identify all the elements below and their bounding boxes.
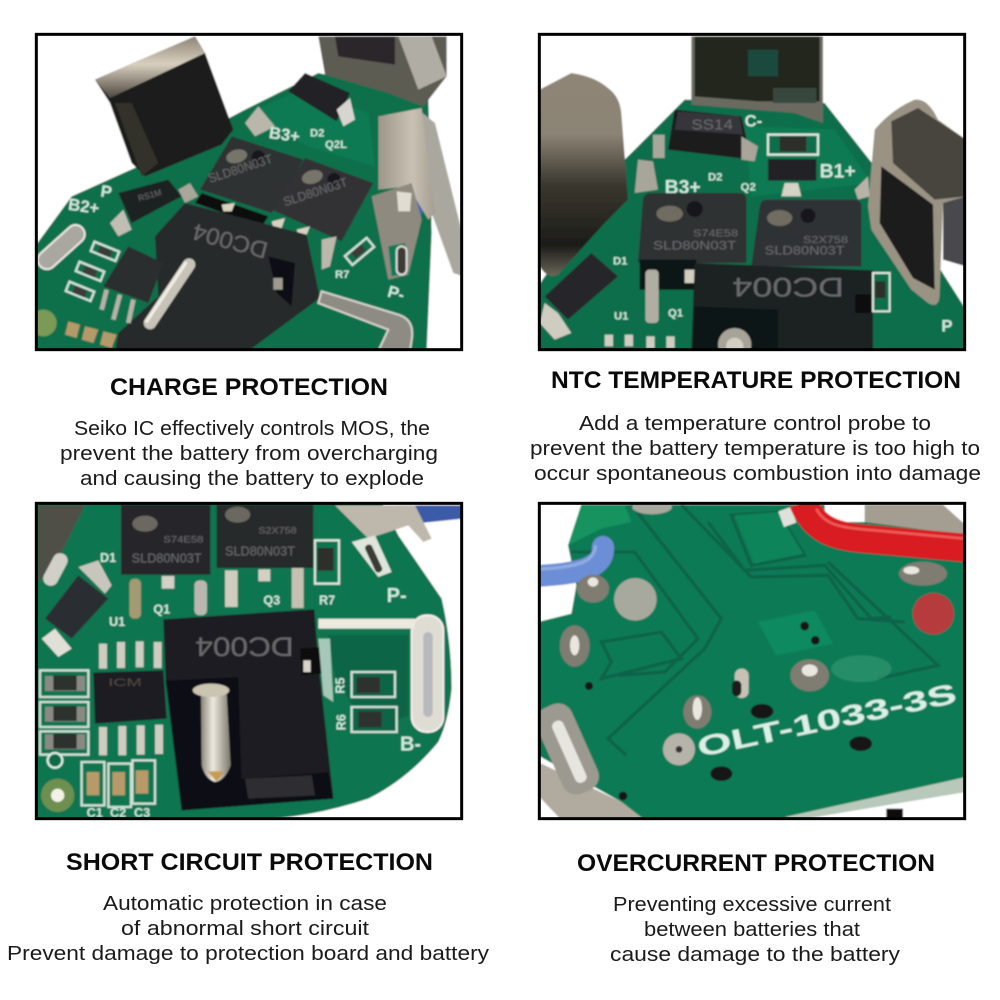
metal clip left (95, 36, 233, 176)
text: ntc temperature description (530, 413, 981, 485)
black connector (163, 609, 333, 810)
component markings: SLD80N03T (132, 552, 202, 566)
component markings: DC004 (732, 272, 844, 302)
component markings: S2X758 (803, 235, 849, 246)
text: overcurrent description (610, 894, 900, 966)
silkscreen labels: B1+ (820, 161, 856, 182)
control ic (103, 246, 163, 303)
solder pads (41, 779, 74, 812)
logo marks (656, 206, 792, 226)
component markings: DC004 (190, 219, 270, 263)
silkscreen labels: R6 (335, 714, 349, 730)
panel: charge protection photo: D2 (310, 127, 324, 139)
text: overcurrent description: Preventing excessive current (613, 894, 891, 916)
text: charge protection description: prevent the battery from overcharging (60, 443, 438, 465)
component markings (108, 526, 297, 689)
circuit board (35, 73, 432, 351)
silkscreen labels: C3 (134, 806, 150, 820)
mosfets (638, 193, 746, 263)
photo frame (539, 34, 965, 350)
component markings: SLD80N03T (207, 152, 275, 186)
text: short circuit description: Prevent damage to protection board and battery (7, 943, 489, 965)
silkscreen labels: B- (400, 733, 421, 755)
diode rs1m (118, 180, 182, 223)
circuit board (35, 502, 452, 820)
component markings: SS14 (691, 118, 733, 134)
diode d2 (288, 73, 350, 121)
left resistors (40, 670, 88, 755)
right metal clip (868, 100, 966, 305)
component markings: SLD80N03T (765, 244, 845, 258)
solder pad and capacitors (38, 308, 58, 338)
silkscreen labels: P- (386, 282, 407, 305)
text: charge protection description (60, 418, 438, 490)
metal clip top (318, 36, 447, 106)
left clip (38, 505, 85, 582)
silkscreen labels: Q3 (263, 594, 280, 608)
board marking: OLT-1033-3S (694, 678, 959, 763)
component markings: SLD80N03T (225, 544, 295, 558)
text: short circuit description: Automatic protection in case (103, 893, 387, 915)
board bottom edge (785, 777, 966, 820)
metal pin (150, 265, 189, 323)
silkscreen labels: C2 (110, 806, 126, 820)
capacitors (82, 760, 155, 807)
circuit board (538, 505, 966, 820)
red wire (778, 507, 796, 527)
silkscreen labels: B2+ (67, 195, 101, 218)
metal clip top right (865, 505, 966, 539)
connector side rail (318, 639, 333, 702)
text: charge protection description: and causing the battery to explode (80, 468, 424, 490)
component markings: DC004 (195, 632, 294, 662)
solder joints (560, 562, 947, 729)
silkscreen labels: P (99, 181, 113, 202)
temperature sensor and resistor (768, 135, 818, 155)
text: overcurrent description: cause damage to the battery (610, 944, 900, 966)
silkscreen labels: D2 (708, 171, 722, 183)
photo frame (36, 34, 462, 350)
silkscreen labels: U1 (614, 311, 628, 323)
silkscreen labels: B3+ (268, 123, 301, 146)
top metal clip (691, 36, 823, 123)
solder tabs (635, 160, 658, 193)
silkscreen labels: D1 (613, 256, 627, 268)
holes (585, 622, 872, 800)
heading: overcurrent protection: OVERCURRENT PROTECTION (577, 850, 935, 877)
silkscreen labels: Q1 (668, 307, 683, 319)
metal pin (201, 694, 231, 782)
slot pin (735, 669, 749, 698)
lead (645, 270, 659, 323)
component markings: S74E58 (163, 535, 203, 545)
blue wire and metal clip (398, 505, 463, 525)
blue wire sliver (416, 200, 424, 216)
panel: overcurrent protection photo (531, 500, 966, 820)
silkscreen labels: P (941, 316, 952, 335)
silkscreen labels behind chips: B3+ (665, 178, 701, 199)
oval slot pad (531, 699, 604, 799)
text: ntc temperature description: occur spontaneous combustion into damage (534, 463, 981, 485)
diode (45, 575, 108, 639)
component markings (653, 118, 849, 302)
text: overcurrent description: between batteries that (644, 919, 860, 941)
heading: ntc temperature protection: NTC TEMPERATURE PROTECTION (551, 367, 961, 394)
copper traces (571, 505, 938, 755)
silkscreen labels: D1 (100, 551, 116, 565)
component markings: S74E58 (693, 228, 739, 239)
control ic (93, 670, 167, 724)
black connector (115, 203, 320, 351)
panel: short circuit protection photo (35, 502, 463, 820)
silkscreen labels: R5 (333, 677, 347, 694)
left oval pad (38, 222, 88, 272)
text: short circuit description: of abnormal short circuit (121, 918, 370, 940)
panel: charge protection photo (30, 33, 463, 351)
silkscreen labels (67, 123, 407, 305)
metal clip right (422, 112, 460, 276)
circuit board (538, 100, 966, 351)
component markings: ICM (108, 677, 142, 689)
component markings: S2X758 (258, 526, 297, 536)
small pads (605, 335, 675, 348)
mosfet leads (129, 579, 141, 619)
silkscreen labels: P- (387, 585, 407, 607)
resistor r7 (873, 273, 890, 311)
silkscreen labels: Q1 (153, 603, 170, 617)
silkscreen labels: C- (745, 111, 762, 130)
text: ntc temperature description: prevent the battery temperature is too high to (530, 438, 980, 460)
silkscreen labels: Q2 (741, 181, 756, 193)
silkscreen labels (87, 551, 421, 820)
photo frame (36, 503, 462, 819)
panel: charge protection photo: R7 (335, 269, 349, 281)
component markings: SLD80N03T (282, 175, 350, 209)
text: short circuit description (7, 893, 489, 965)
black connector (691, 263, 873, 351)
photo frame (539, 503, 965, 819)
silkscreen labels (613, 111, 952, 335)
left metal clip (540, 73, 628, 276)
logo marks (132, 507, 250, 532)
diode ss14 (668, 110, 751, 160)
round test pads (614, 578, 657, 621)
lighter copper area (758, 610, 833, 655)
silkscreen labels: C1 (87, 806, 103, 820)
silkscreen labels: U1 (109, 615, 125, 629)
heading: charge protection: CHARGE PROTECTION (110, 374, 388, 401)
text: ntc temperature description: Add a temperature control probe to (579, 413, 931, 435)
component markings (137, 152, 350, 263)
right resistors (352, 672, 397, 732)
mosfets (200, 136, 303, 213)
diode rs1m (545, 253, 618, 320)
resistor r7 (315, 540, 339, 584)
silkscreen labels: R7 (319, 594, 335, 608)
lower right pad (318, 291, 412, 351)
mosfet logo marks (225, 147, 324, 186)
text: charge protection description: Seiko IC effectively controls MOS, the (74, 418, 430, 440)
component markings: RS1M (137, 187, 163, 203)
blue wire (538, 547, 603, 576)
b- oval pad (412, 615, 443, 732)
flux residue (831, 655, 891, 682)
panel: ntc temperature protection photo (538, 33, 966, 361)
mosfets (121, 505, 210, 575)
heading: short circuit protection: SHORT CIRCUIT PROTECTION (66, 849, 433, 876)
panel: charge protection photo: Q2L (325, 139, 347, 151)
component markings: SLD80N03T (653, 239, 737, 253)
